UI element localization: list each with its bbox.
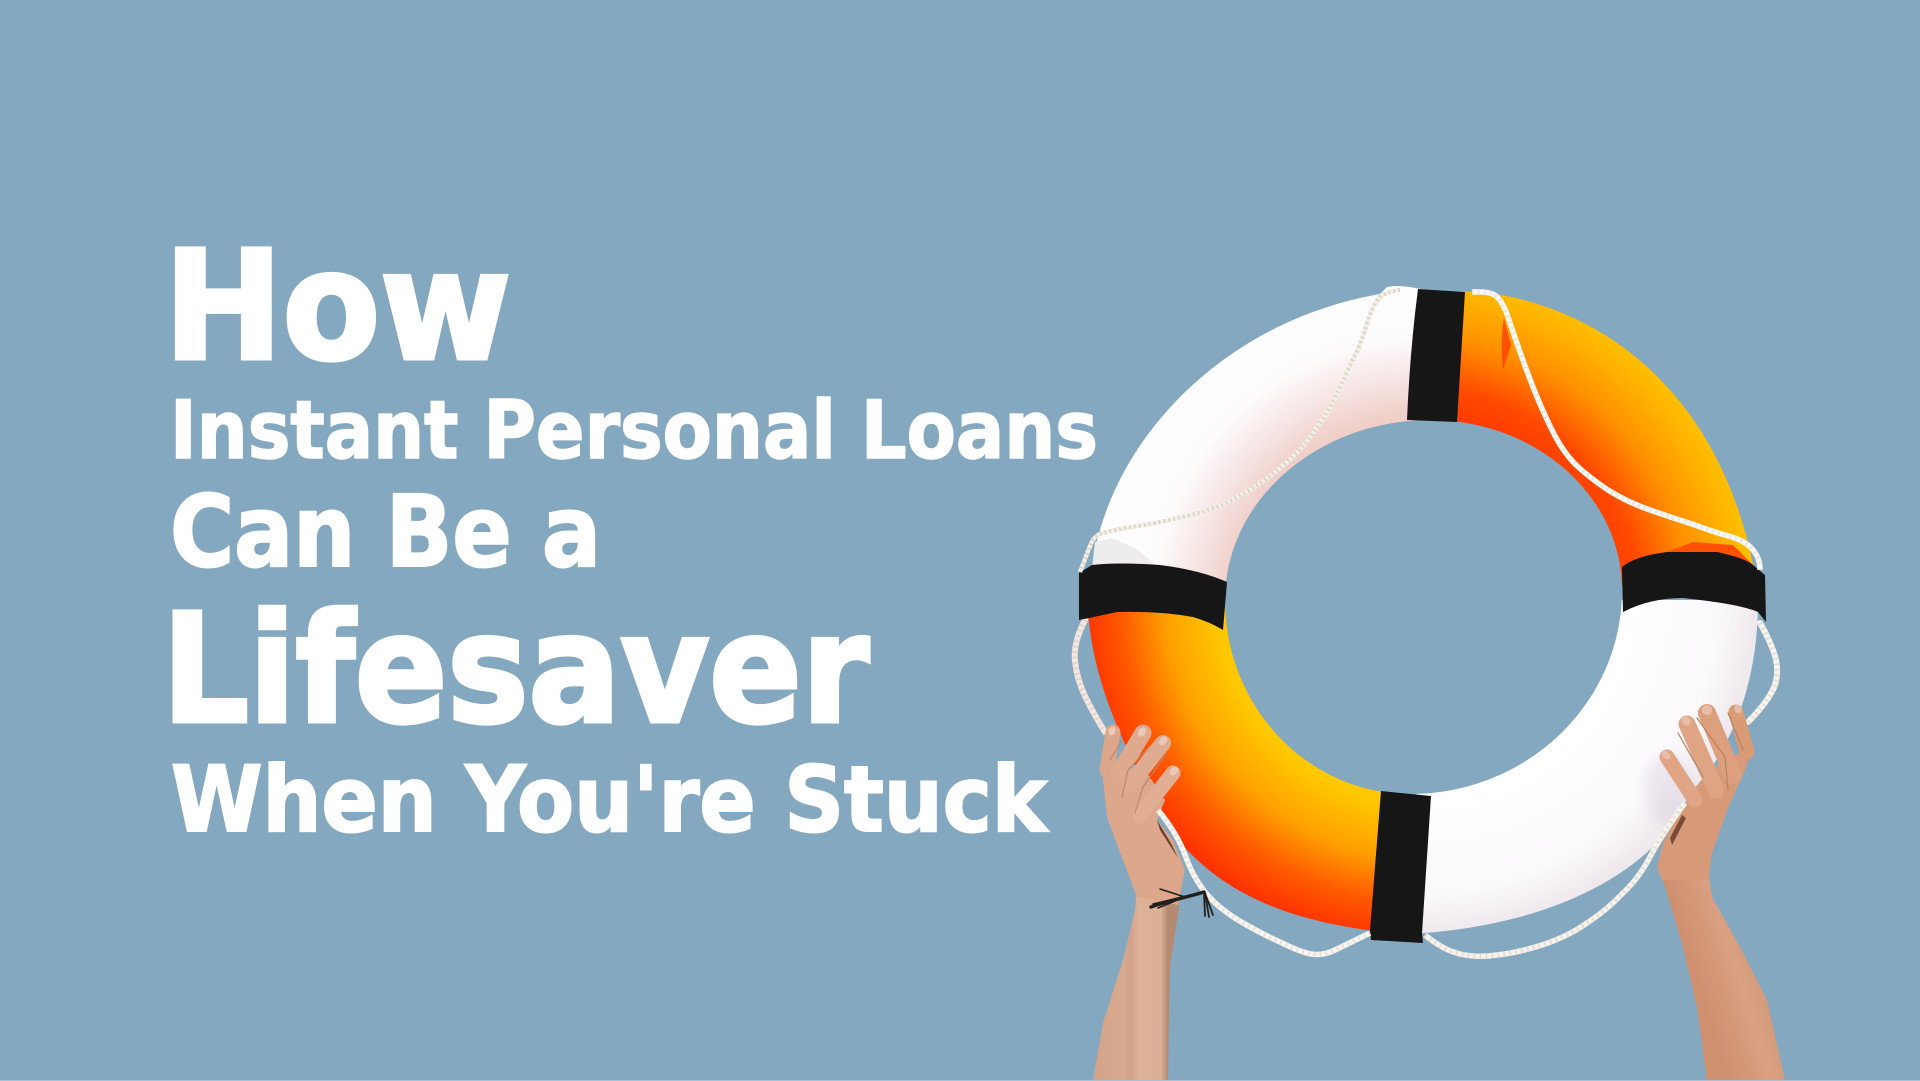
ring: seam patch (1092, 538, 1155, 568)
bracelet (1151, 889, 1213, 917)
title line: How: How (164, 218, 511, 394)
title line: Lifesaver: Lifesaver (162, 582, 869, 758)
ring: centre opening (1225, 420, 1622, 794)
ring: orange top right (1440, 291, 1755, 600)
left arm (1093, 885, 1180, 1080)
rope: left loop (1075, 620, 1105, 732)
left hand (1102, 725, 1185, 905)
rope: right loop (1748, 623, 1777, 722)
photo: life ring held up by two hands (1075, 286, 1785, 1080)
left nails (1107, 725, 1180, 777)
ring: hand shadow (1644, 754, 1692, 826)
right finger creases (1678, 713, 1743, 790)
rope: top right (1472, 292, 1760, 570)
right nails (1660, 703, 1743, 761)
left index finger (1140, 773, 1173, 815)
left middle finger (1130, 743, 1163, 785)
right arm (1658, 866, 1785, 1080)
title (162, 218, 1098, 853)
right hand (1657, 703, 1753, 880)
band: right (1622, 552, 1766, 622)
left pinky (1107, 732, 1113, 770)
left palm shadow (1157, 820, 1178, 858)
right index finger (1667, 757, 1695, 800)
ring: orange bottom left (1088, 600, 1430, 934)
ring: white top left (1092, 286, 1425, 620)
right palm shadow (1670, 815, 1686, 845)
band: left (1079, 564, 1227, 630)
left ring finger (1118, 733, 1143, 775)
ring (1079, 286, 1766, 943)
title line: Instant Personal Loans: Instant Personal Loans (170, 384, 1098, 477)
rope: bottom right (1425, 803, 1685, 956)
right pinky (1736, 712, 1747, 752)
rope: top left (1080, 290, 1400, 572)
left finger creases (1110, 740, 1166, 813)
band: bottom (1370, 791, 1431, 943)
title line: Can Be a: Can Be a (170, 475, 601, 590)
band: top (1407, 289, 1465, 422)
right palm (1657, 745, 1753, 880)
left palm (1102, 770, 1185, 905)
right ring finger (1707, 713, 1733, 775)
right middle finger (1687, 724, 1716, 790)
title line: When You're Stuck: When You're Stuck (171, 748, 1050, 853)
ring: white bottom right (1410, 600, 1758, 934)
ring: fold shadows (1502, 318, 1753, 565)
rope: bottom left (1158, 810, 1370, 954)
